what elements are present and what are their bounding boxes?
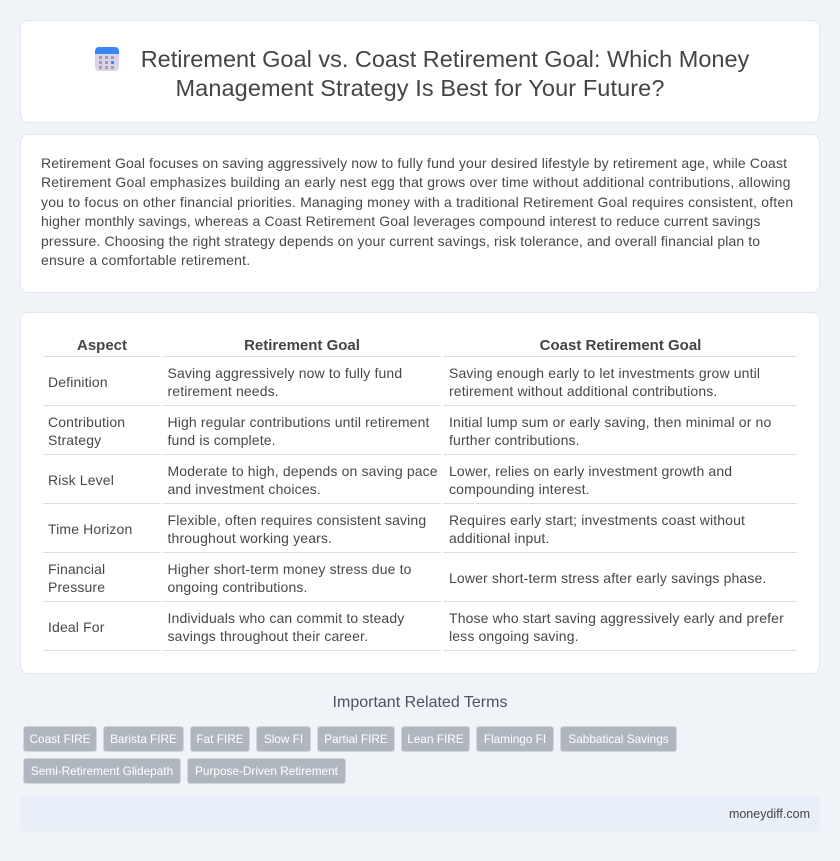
row: contribution strategy: Strategy — [48, 432, 101, 448]
tags: related terms: Coast FIRE — [30, 732, 90, 746]
row: definition: Saving aggressively now to fully fund — [168, 365, 402, 381]
row: ideal for: Ideal For — [48, 619, 105, 635]
tags: related terms: Semi-Retirement Glidepath — [31, 764, 173, 778]
table header: Coast Retirement Goal — [540, 337, 701, 354]
panel: intro text: ensure a comfortable retirement. — [41, 252, 250, 268]
row: definition — [48, 365, 760, 399]
row: contribution strategy: further contributions. — [449, 432, 580, 448]
table header — [77, 337, 701, 354]
panel: intro text: Retirement Goal emphasizes building an early nest egg that grows over time without additional contributions, allowing — [41, 174, 791, 190]
row: time horizon: Requires early start; investments coast without — [449, 512, 745, 528]
row: financial pressure: Financial — [48, 561, 105, 577]
row: contribution strategy: High regular contributions until retirement — [168, 414, 430, 430]
title: Management Strategy Is Best for Your Future? — [175, 75, 665, 101]
row: contribution strategy: Initial lump sum or early saving, then minimal or no — [449, 414, 771, 430]
tags: related terms: Purpose-Driven Retirement — [195, 764, 338, 778]
tags: related terms: Lean FIRE — [407, 732, 464, 746]
row: definition: retirement without additional contributions. — [449, 383, 717, 399]
tags: related terms: Flamingo FI — [484, 732, 546, 746]
row: ideal for: savings throughout their career. — [168, 628, 368, 644]
row: contribution strategy — [48, 414, 771, 448]
row: definition: Saving enough early to let investments grow until — [449, 365, 760, 381]
row: time horizon — [48, 512, 745, 546]
row: definition: Definition — [48, 374, 108, 390]
row: financial pressure — [48, 561, 766, 595]
panel: intro text: you to focus on other financial priorities. Managing money with a traditional Retirement Goal requires consistent, often — [41, 194, 793, 210]
title: Retirement Goal vs. Coast Retirement Goal: Which Money — [141, 46, 749, 72]
panel: intro text: higher monthly savings, whereas a Coast Retirement Goal leverages compound interest to reduce current savings — [41, 213, 760, 229]
row: risk level: Risk Level — [48, 472, 114, 488]
title — [141, 46, 750, 101]
panel: comparison table — [20, 312, 820, 674]
row: ideal for — [48, 610, 784, 644]
row: financial pressure: Higher short-term money stress due to — [168, 561, 412, 577]
row: contribution strategy: fund is complete. — [168, 432, 276, 448]
tags: related terms — [23, 726, 677, 784]
row: ideal for: Those who start saving aggressively early and prefer — [449, 610, 784, 626]
panel: intro text — [20, 134, 820, 293]
tags: related terms: Partial FIRE — [324, 732, 388, 746]
footer — [20, 797, 820, 831]
row: risk level: compounding interest. — [449, 481, 590, 497]
panel: header — [20, 20, 820, 123]
row: risk level: Lower, relies on early investment growth and — [449, 463, 732, 479]
panel: intro text: Retirement Goal focuses on saving aggressively now to fully fund your desired lifestyle by retirement age, while Coast — [41, 155, 787, 171]
table header: Aspect — [77, 337, 127, 354]
tags: related terms: Barista FIRE — [110, 732, 177, 746]
row: contribution strategy: Contribution — [48, 414, 125, 430]
table header: Retirement Goal — [244, 337, 360, 354]
row: time horizon: additional input. — [449, 530, 549, 546]
tags: related terms: Fat FIRE — [196, 732, 244, 746]
row: time horizon: Time Horizon — [48, 521, 132, 537]
row: risk level — [48, 463, 732, 497]
row: time horizon: Flexible, often requires consistent saving — [168, 512, 426, 528]
row: risk level: Moderate to high, depends on saving pace — [168, 463, 438, 479]
icon: calendar — [95, 47, 119, 71]
row: financial pressure: ongoing contributions. — [168, 579, 308, 595]
footer: site name: moneydiff.com — [729, 807, 810, 821]
row: time horizon: throughout working years. — [168, 530, 332, 546]
row: ideal for: Individuals who can commit to steady — [168, 610, 404, 626]
panel: intro text: pressure. Choosing the right strategy depends on your current savings, risk tolerance, and overall financial plan to — [41, 233, 760, 249]
tags: related terms: Sabbatical Savings — [568, 732, 669, 746]
row: ideal for: less ongoing saving. — [449, 628, 579, 644]
row: financial pressure: Pressure — [48, 579, 105, 595]
row: risk level: and investment choices. — [168, 481, 321, 497]
row: financial pressure: Lower short-term stress after early savings phase. — [449, 570, 766, 586]
row: definition: retirement needs. — [168, 383, 279, 399]
tags: related terms: Slow FI — [264, 732, 303, 746]
heading: important related terms: Important Related Terms — [333, 694, 507, 711]
